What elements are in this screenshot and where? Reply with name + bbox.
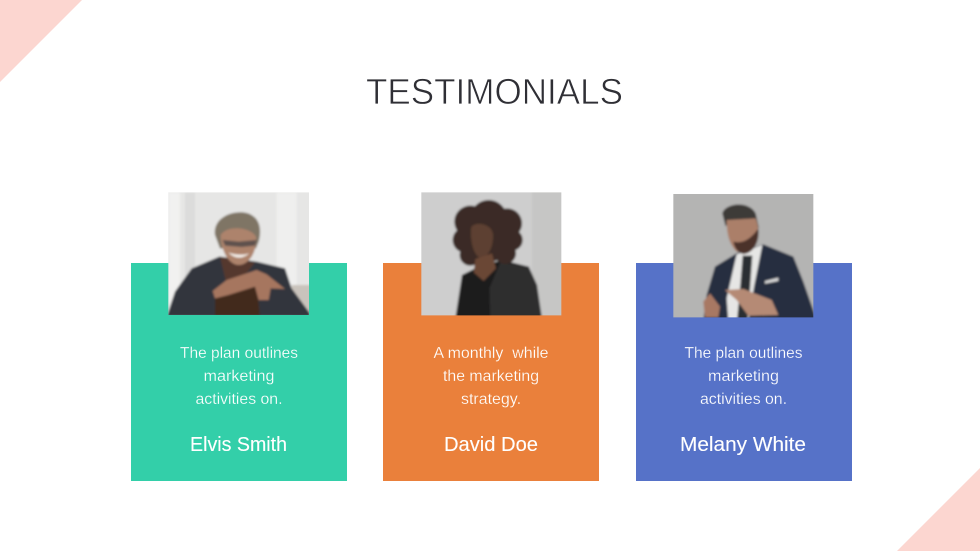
quote text [684, 345, 802, 408]
name: Melany White [680, 434, 806, 456]
decorative corner triangle: top left [0, 0, 82, 82]
quote text: marketing [708, 368, 779, 385]
card background: blue [636, 263, 852, 481]
name: Elvis Smith [190, 434, 287, 456]
photo: Melany White [670, 191, 817, 321]
quote text: The plan outlines [684, 345, 802, 362]
decorative corner triangle: bottom right [897, 468, 980, 551]
photo: David Doe [418, 189, 565, 319]
panel: David Doe [383, 189, 599, 481]
quote text [180, 345, 298, 408]
quote text [434, 345, 549, 408]
quote text: activities on. [700, 391, 787, 408]
quote text: marketing [204, 368, 274, 385]
quote text: strategy. [461, 391, 521, 408]
card background: green [131, 263, 347, 481]
quote text: the marketing [443, 368, 539, 385]
card background: orange [383, 263, 599, 481]
quote text: The plan outlines [180, 345, 298, 362]
quote text: A monthly while [434, 345, 549, 362]
title: TESTIMONIALS [366, 71, 623, 112]
name: David Doe [444, 434, 538, 456]
panel: Elvis Smith [131, 189, 347, 481]
quote text: activities on. [196, 391, 282, 408]
photo: Elvis Smith [165, 189, 312, 318]
panel: Melany White [636, 191, 852, 481]
